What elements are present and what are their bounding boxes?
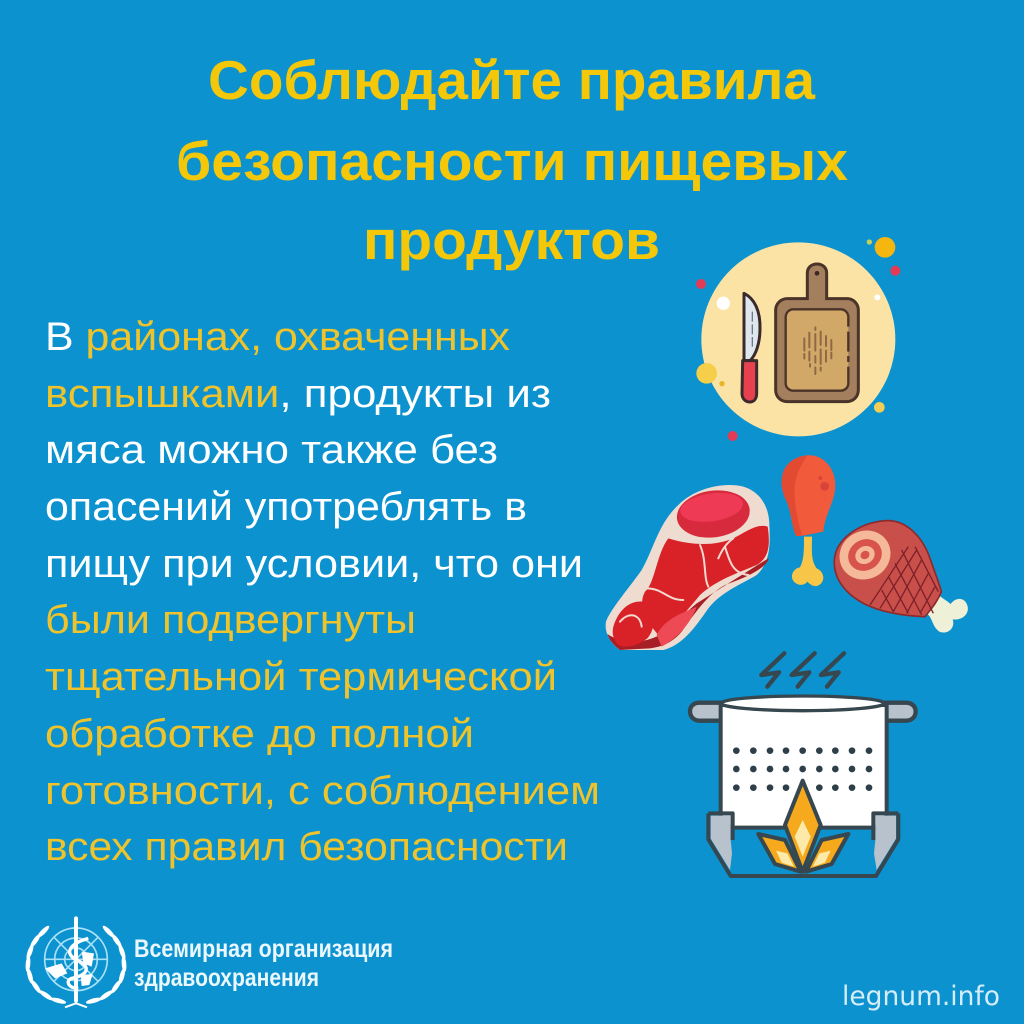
steam <box>761 653 844 687</box>
left laurel <box>25 924 67 1005</box>
body text: были подвергнуты <box>45 598 416 642</box>
continents <box>45 963 67 978</box>
title: продуктов <box>363 209 660 271</box>
pot handles <box>690 703 916 721</box>
body text: готовности, с соблюдением <box>45 769 600 813</box>
WHO name: здравоохранения <box>134 964 319 992</box>
pot body <box>721 705 887 828</box>
icon: steak <box>606 485 770 650</box>
icon: knife and cutting board in circle <box>696 237 900 441</box>
watermark: legnum.info <box>842 981 1000 1012</box>
body text: обработке до полной <box>45 712 474 756</box>
body text: В районах, охваченных <box>45 315 510 359</box>
title: безопасности пищевых <box>176 130 848 192</box>
right laurel <box>85 924 127 1005</box>
title: Соблюдайте правила <box>208 49 815 111</box>
rod <box>70 918 82 1001</box>
body text: пищу при условии, что они <box>45 542 583 586</box>
burner <box>711 816 732 870</box>
body text: тщательной термической <box>45 655 557 699</box>
globe <box>45 928 107 991</box>
body text <box>45 315 600 869</box>
icon: chicken drumstick <box>782 455 835 586</box>
WHO name: Всемирная организация <box>134 935 393 963</box>
title <box>176 49 848 271</box>
icon: pot on burner <box>690 653 916 876</box>
icon: ham <box>830 521 968 633</box>
flames <box>758 834 801 872</box>
body text: всех правил безопасности <box>45 825 568 869</box>
body text: вспышками , продукты из <box>45 372 551 416</box>
WHO logo <box>25 918 127 1007</box>
WHO name <box>134 935 393 992</box>
body text: мяса можно также без <box>45 428 498 472</box>
pot holes <box>733 747 872 791</box>
body text: опасений употреблять в <box>45 485 527 529</box>
